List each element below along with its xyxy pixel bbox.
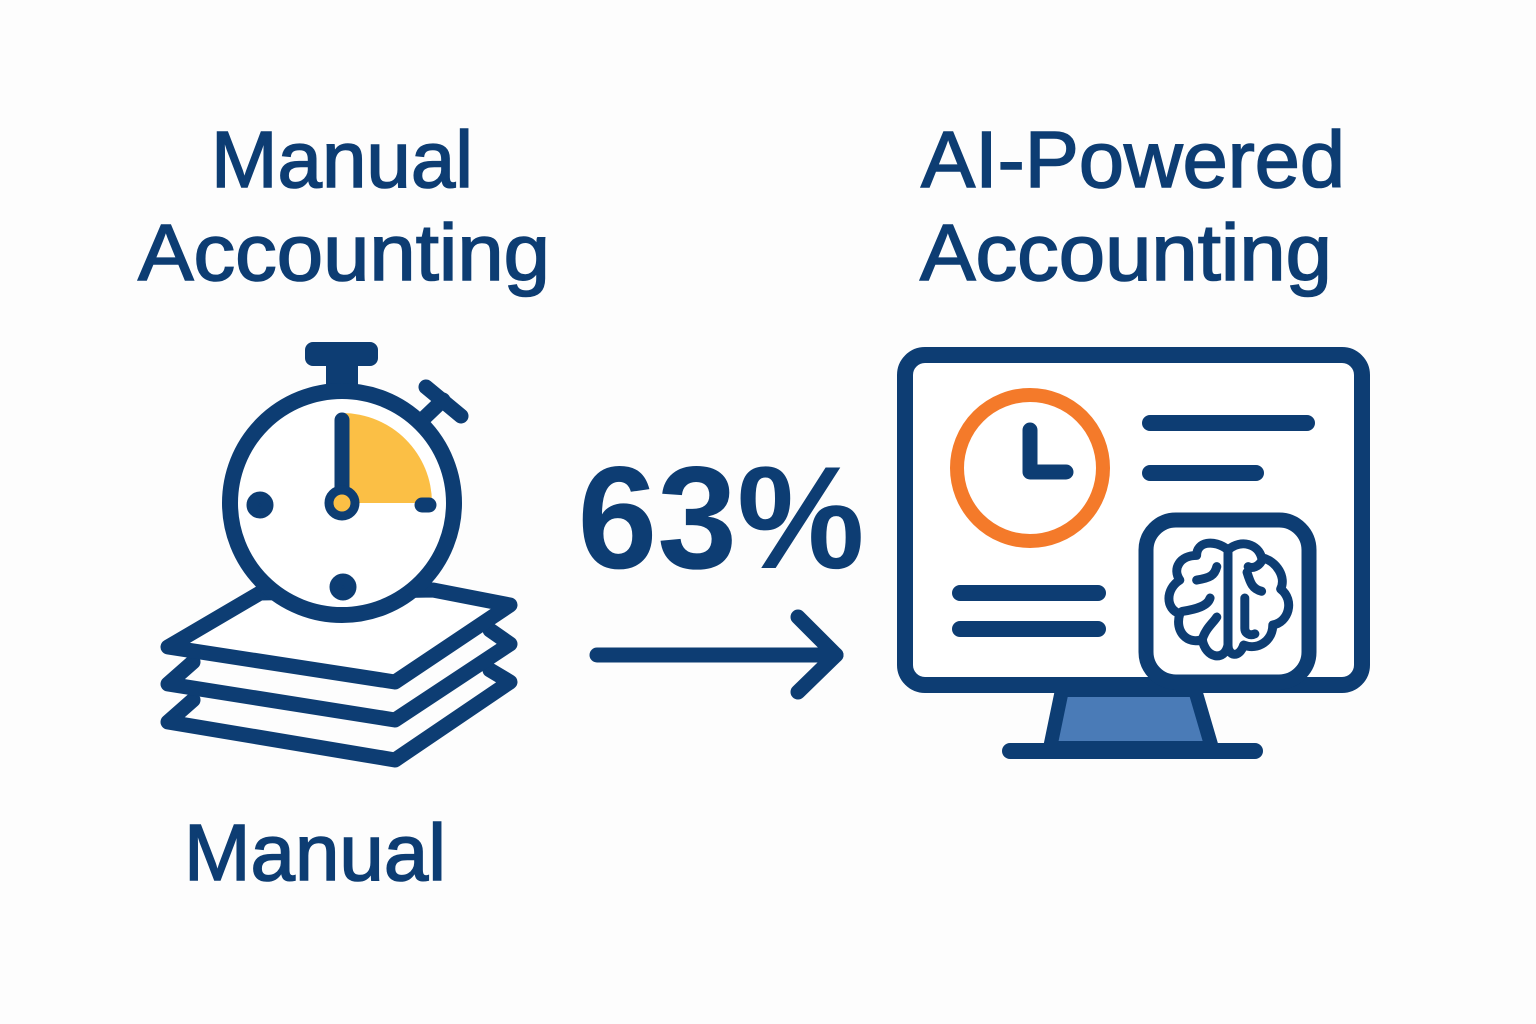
icon: brain box bbox=[1146, 520, 1309, 682]
text lines bbox=[960, 423, 1307, 629]
title: AI-powered accounting: Accounting bbox=[920, 208, 1332, 297]
title: AI-powered accounting: AI-Powered bbox=[921, 115, 1345, 204]
icon: monitor with AI dashboard bbox=[905, 355, 1362, 751]
label: manual: Manual bbox=[184, 808, 446, 897]
stat: 63%: 63% bbox=[578, 436, 864, 599]
paper stack bbox=[168, 590, 510, 760]
title: AI-powered accounting bbox=[920, 115, 1345, 297]
stopwatch body bbox=[230, 342, 461, 615]
arrow bbox=[597, 617, 836, 692]
monitor frame bbox=[905, 355, 1362, 685]
title: manual accounting bbox=[138, 115, 550, 297]
title: manual accounting: Manual bbox=[211, 115, 473, 204]
title: manual accounting: Accounting bbox=[138, 208, 550, 297]
icon: stopwatch on paper stack bbox=[168, 342, 510, 760]
monitor stand bbox=[1010, 690, 1255, 751]
icon: orange clock bbox=[957, 395, 1103, 541]
